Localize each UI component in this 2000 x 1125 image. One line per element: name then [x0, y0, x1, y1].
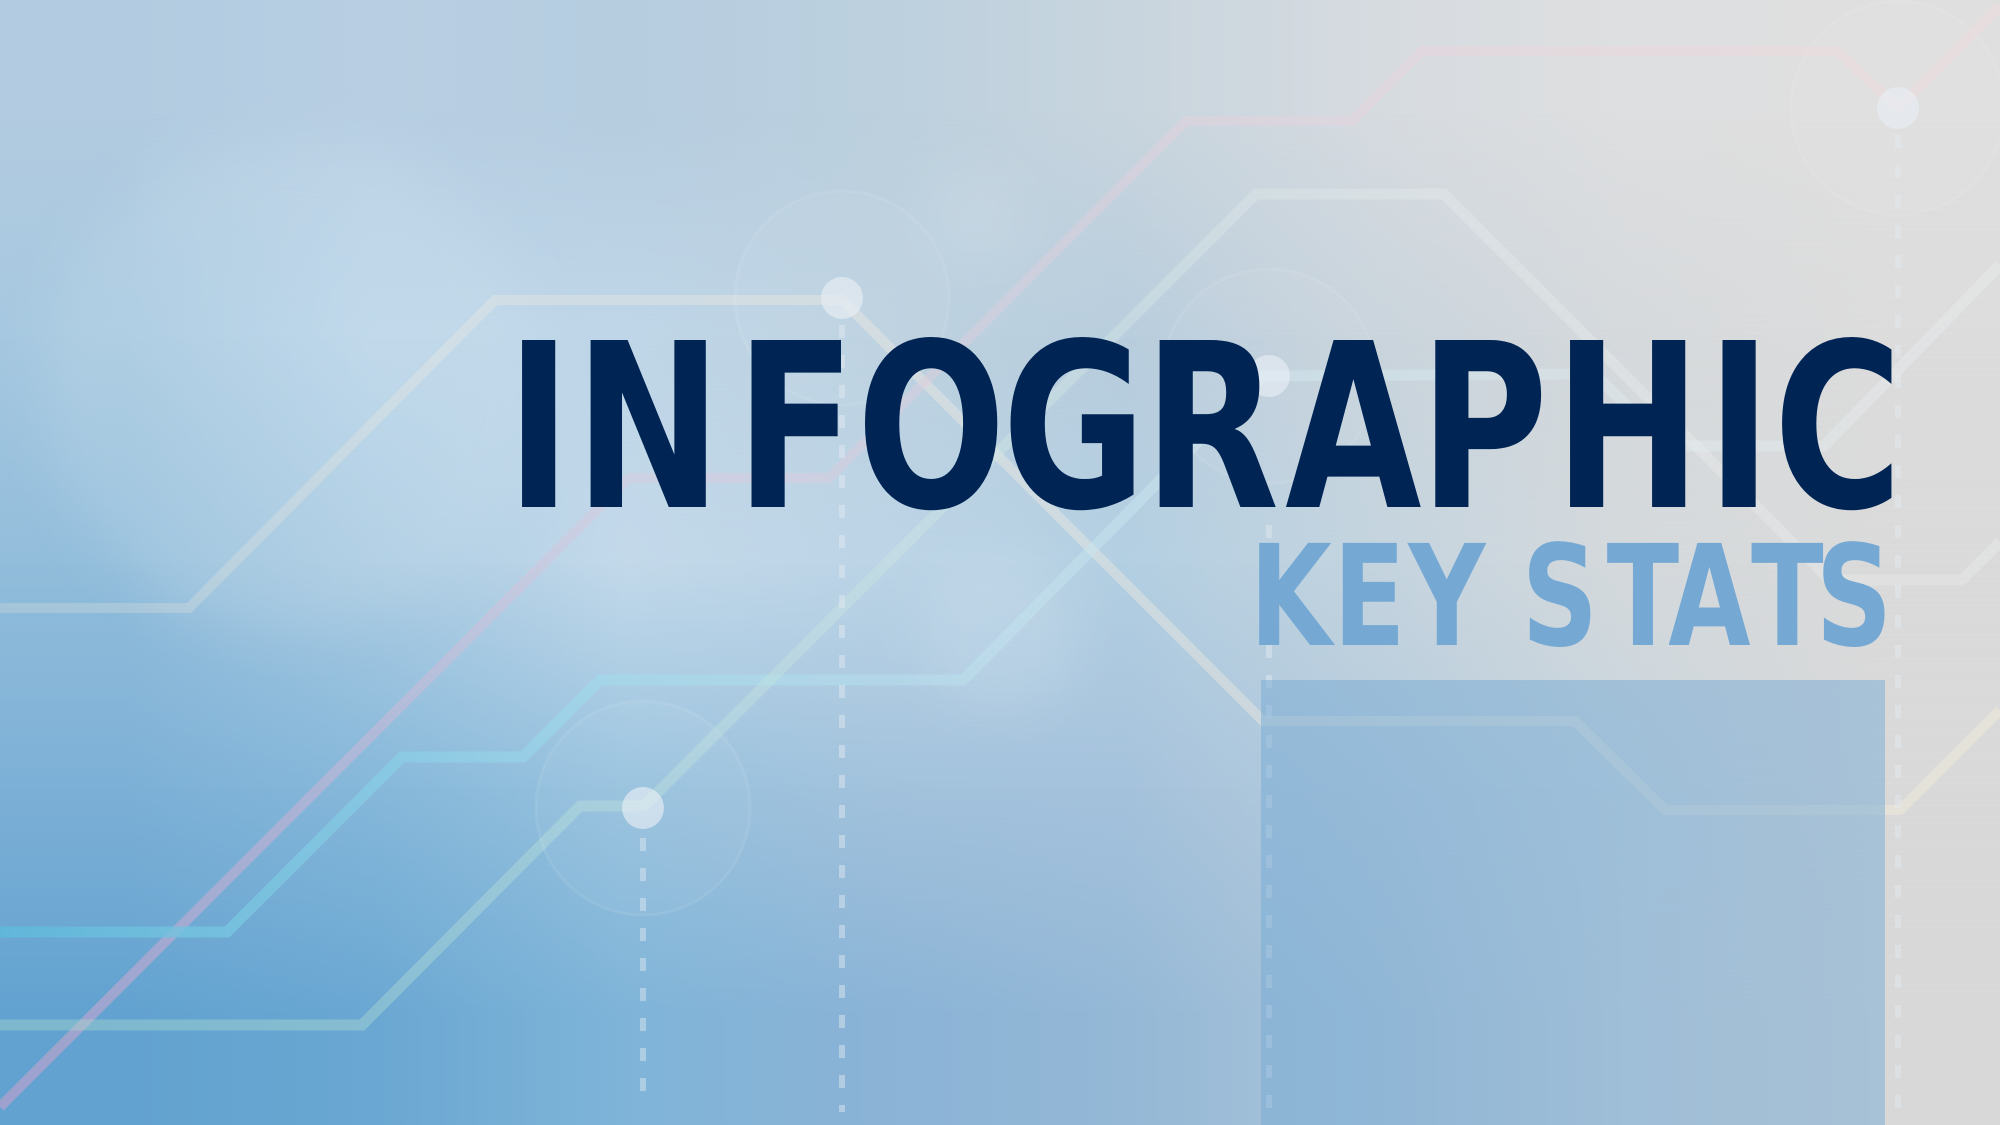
- node dots: [622, 87, 1919, 829]
- dashed drop lines: [643, 135, 1898, 1125]
- circuit line: pale green: [0, 194, 2000, 1025]
- circuit line: beige: [0, 300, 2000, 810]
- rings around nodes: [536, 1, 2000, 915]
- soft bokeh glows: [45, 140, 1076, 713]
- subtitle: KEY STATS: [1249, 517, 1892, 679]
- circuit line: cyan: [0, 265, 2000, 932]
- translucent blue panel: [1261, 680, 1885, 1125]
- title: INFOGRAPHIC: [506, 295, 1903, 562]
